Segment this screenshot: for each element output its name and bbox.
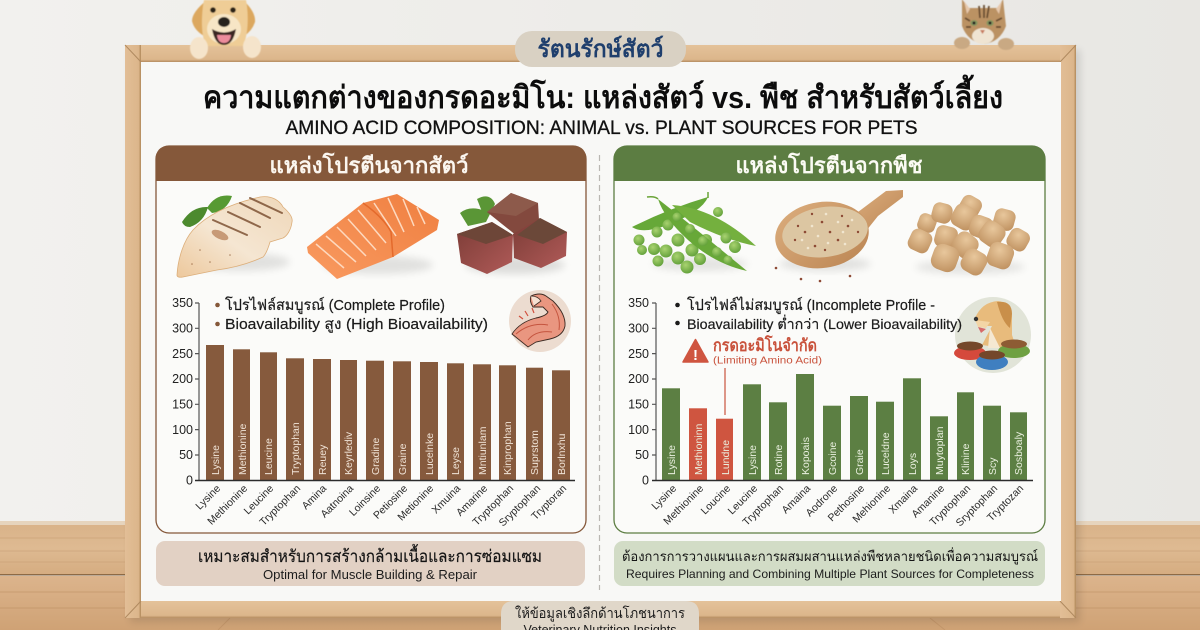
bar chart: animal sources: 200 [172,372,193,386]
panel header: plant: แหล่งโปรตีนจากพืช [736,152,923,178]
x-axis labels: Xmaina [886,483,920,516]
x-axis labels: Sryptophan [497,483,543,529]
bullet text: animal [215,296,488,333]
background: wooden floor [0,576,1200,630]
bullet text: animal: โปรไฟล์สมบูรณ์ (Complete Profile) [225,296,445,314]
bar inner labels: Gcoine [827,442,839,475]
x-axis labels: Amina [300,483,329,512]
summary: plant [614,541,1045,586]
bar chart: animal sources: 50 [179,448,193,462]
x-axis labels: Tryptophan [257,483,303,528]
callout: limiting amino acid: (Limiting Amino Acid) [713,354,822,366]
bar inner labels: Methionine [237,423,249,475]
panel: animal protein [156,146,586,533]
bar chart: animal sources: 150 [172,398,193,412]
x-axis labels: Loucine [699,483,733,517]
bar chart: plant sources: 0 [642,474,649,488]
bar chart: animal sources: 0 [186,474,193,488]
bar inner labels [666,423,1025,475]
panel header: animal: แหล่งโปรตีนจากสัตว์ [270,152,468,178]
panel: plant protein [614,146,1045,533]
x-axis labels: Mehionine [850,483,893,525]
bar chart: plant sources: 200 [628,372,649,386]
x-axis labels: Methionine [661,483,706,527]
bar inner labels: Sosboaly [1013,431,1025,475]
bar inner labels: Scy [987,457,999,475]
x-axis labels: Lysine [193,483,223,512]
bar chart: animal sources: 350 [172,296,193,310]
bar inner labels: Leucine [263,438,275,475]
x-axis labels: Leucine [242,483,276,517]
bar inner labels: Graine [397,443,409,475]
food: quinoa in wooden spoon [771,190,903,282]
bottom badge [501,601,699,630]
bar chart: animal sources [172,296,575,529]
summary: animal [156,541,585,586]
title [203,74,1003,139]
bar chart: animal sources: 300 [172,322,193,336]
summary: animal: Optimal for Muscle Building & Repair [263,568,477,582]
x-axis labels: Methionine [205,483,250,527]
x-axis labels: Tryptophan [927,483,973,528]
summary: plant: Requires Planning and Combining Multiple Plant Sources for Completeness [626,567,1034,581]
bullet text: plant: โปรไฟล์ไม่สมบูรณ์ (Incomplete Profile - [687,296,935,314]
x-axis labels: Aatnoina [318,483,356,520]
panel header: plant [614,146,1045,181]
icon: dog with food bowls [954,297,1031,373]
x-axis labels: Tryptophan [470,483,516,528]
title: ความแตกต่างของกรดอะมิโน: แหล่งสัตว์ vs. พืช สำหรับสัตว์เลี้ยง [203,74,1003,115]
bar inner labels: Rotine [773,444,785,475]
bar inner labels: Leyse [450,447,462,475]
bar inner labels: Keyrlediv [343,431,355,475]
food: salmon fillet [307,194,439,279]
x-axis labels: Pethosine [826,483,867,524]
bar chart: plant sources: 150 [628,398,649,412]
bar inner labels: Lucelnke [424,433,436,475]
bar chart: plant sources: 350 [628,296,649,310]
x-axis labels: Petiosine [371,483,410,522]
bar inner labels: Mntiunlam [477,426,489,475]
x-axis labels [649,483,1026,529]
bar inner labels: Loys [907,453,919,475]
food: beef cubes [457,193,567,274]
food: grilled chicken [177,196,292,277]
bar inner labels [210,421,568,475]
callout: limiting amino acid [683,335,822,415]
background: baseboard [0,521,1200,576]
bar inner labels: Tryptophan [290,422,302,475]
x-axis labels: Xmuina [429,483,463,516]
x-axis labels: Tryptophan [740,483,786,528]
bottom badge: ให้ข้อมูลเชิงลึกด้านโภชนาการ [515,605,685,622]
dog peeking over frame [190,0,261,59]
x-axis labels: Lysine [649,483,679,512]
bar chart: plant sources: 50 [635,448,649,462]
bullet text: plant: Bioavailability ต่ำกว่า (Lower Bioavailability) [687,315,962,332]
bullet text: plant [675,296,962,332]
x-axis labels: Metionine [395,483,436,523]
bar inner labels: Kinprophan [502,421,514,475]
bar inner labels: Graie [854,449,866,475]
x-axis labels: Loinsine [347,483,383,519]
callout: limiting amino acid: ! [693,347,698,364]
panel header: animal [156,146,586,181]
bullet text: animal: Bioavailability สูง (High Bioavailability) [225,317,488,333]
bar inner labels: Kopoais [800,437,812,475]
bar chart: plant sources [628,296,1033,529]
x-axis labels [193,483,569,529]
bar inner labels: Reuey [317,444,329,475]
bar chart: plant sources: 250 [628,347,649,361]
bar chart: plant sources: 300 [628,322,649,336]
bar chart: plant sources: 100 [628,423,649,437]
x-axis labels: Amarine [454,483,490,519]
food: peas [632,192,756,274]
bar inner labels: Lundne [720,440,732,475]
bar inner labels: Lysine [666,445,678,475]
cat peeking over frame [954,0,1014,50]
center dashed divider [598,155,600,590]
title: AMINO ACID COMPOSITION: ANIMAL vs. PLANT SOURCES FOR PETS [286,118,918,139]
wooden frame [125,45,1080,622]
bar inner labels: Muytoplan [934,426,946,475]
x-axis labels: Amaina [779,483,813,516]
x-axis labels: Aodrone [804,483,840,519]
bar inner labels: Suprstom [529,430,541,475]
food: soy chunks [905,192,1033,278]
callout: limiting amino acid: กรดอะมิโนจำกัด [713,335,817,355]
x-axis labels: Tryptozan [985,483,1026,524]
summary: plant: ต้องการการวางแผนและการผสมผสานแหล่งพืชหลายชนิดเพื่อความสมบูรณ์ [622,547,1038,565]
x-axis labels: Tryptoran [529,483,569,523]
x-axis labels: Sryptophan [954,483,1000,529]
bar inner labels: Lysine [210,445,222,475]
summary: animal: เหมาะสมสำหรับการสร้างกล้ามเนื้อและการซ่อมแซม [198,544,542,566]
x-axis labels: Leucine [726,483,760,517]
bar inner labels: Klinine [960,443,972,475]
bar chart: animal sources: 250 [172,347,193,361]
bar inner labels: Borlnxhu [556,433,568,475]
bar chart: animal sources: 100 [172,423,193,437]
bar inner labels: Methioninn [693,423,705,475]
x-axis labels: Amanine [909,483,947,520]
top brand badge [515,31,686,67]
bar inner labels: Gradine [370,437,382,475]
top brand badge: รัตนรักษ์สัตว์ [538,35,664,63]
bar inner labels: Lysine [747,445,759,475]
icon: flexed muscle [509,290,571,352]
bar inner labels: Luceldne [880,432,892,475]
